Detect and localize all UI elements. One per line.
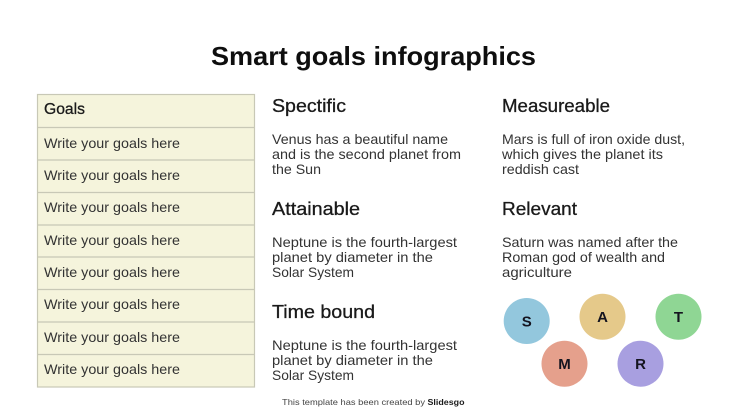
text: specific description: Venus has a beautiful name: [272, 131, 448, 147]
circle S: [504, 298, 550, 344]
text: time bound description: Solar System: [272, 367, 354, 383]
circle M: [542, 341, 588, 387]
panel: goals table: [38, 94, 254, 387]
footer credit: This template has been created by: [282, 397, 426, 407]
text: attainable description: planet by diameter in the: [272, 249, 433, 265]
circle A: A: [597, 309, 608, 326]
text: relevant description: Saturn was named after the: [502, 234, 678, 250]
block: specific: [272, 96, 461, 177]
text: measureable description: which gives the planet its: [501, 146, 663, 162]
text: measureable description: [501, 131, 685, 177]
heading: specific: Spectific: [272, 96, 346, 116]
table row 8: Write your goals here: [44, 361, 180, 377]
block: attainable: [272, 199, 457, 280]
text: specific description: and is the second planet from: [272, 146, 461, 162]
table row 3: Write your goals here: [44, 199, 180, 215]
circle R: R: [635, 356, 646, 373]
circle A: [580, 294, 626, 340]
block: time bound: [272, 302, 457, 383]
heading: time bound: Time bound: [272, 302, 375, 322]
heading: measureable: Measureable: [502, 96, 610, 116]
table row 2: Write your goals here: [44, 167, 180, 183]
text: relevant description: agriculture: [502, 264, 572, 280]
block: measureable: [501, 96, 685, 177]
circle R: [618, 341, 664, 387]
text: time bound description: Neptune is the fourth-largest: [272, 337, 457, 353]
circle S: S: [522, 314, 532, 330]
text: time bound description: [272, 337, 457, 383]
circle T: [656, 294, 702, 340]
table row 4: Write your goals here: [44, 232, 180, 248]
table row 7: Write your goals here: [44, 329, 180, 345]
heading: attainable: Attainable: [272, 199, 360, 219]
circle T: T: [674, 309, 683, 326]
text: attainable description: [272, 234, 457, 280]
text: specific description: the Sun: [272, 161, 321, 177]
text: specific description: [272, 131, 461, 177]
table row 6: Write your goals here: [44, 296, 180, 312]
text: measureable description: reddish cast: [502, 161, 579, 177]
text: time bound description: planet by diameter in the: [272, 352, 433, 368]
text: relevant description: Roman god of wealth and: [502, 249, 665, 265]
footer credit: Slidesgo: [428, 397, 464, 407]
table row 5: Write your goals here: [44, 264, 180, 280]
text: attainable description: Solar System: [272, 264, 354, 280]
heading: relevant: Relevant: [502, 199, 577, 219]
circle M: M: [558, 356, 571, 373]
text: relevant description: [502, 234, 678, 280]
table row 1: Write your goals here: [44, 135, 180, 151]
title: Smart goals infographics: [211, 41, 536, 71]
block: relevant: [502, 199, 678, 280]
SMART circles: [504, 294, 702, 387]
text: attainable description: Neptune is the fourth-largest: [272, 234, 457, 250]
table heading: goals: Goals: [44, 101, 85, 118]
text: measureable description: Mars is full of iron oxide dust,: [502, 131, 685, 147]
